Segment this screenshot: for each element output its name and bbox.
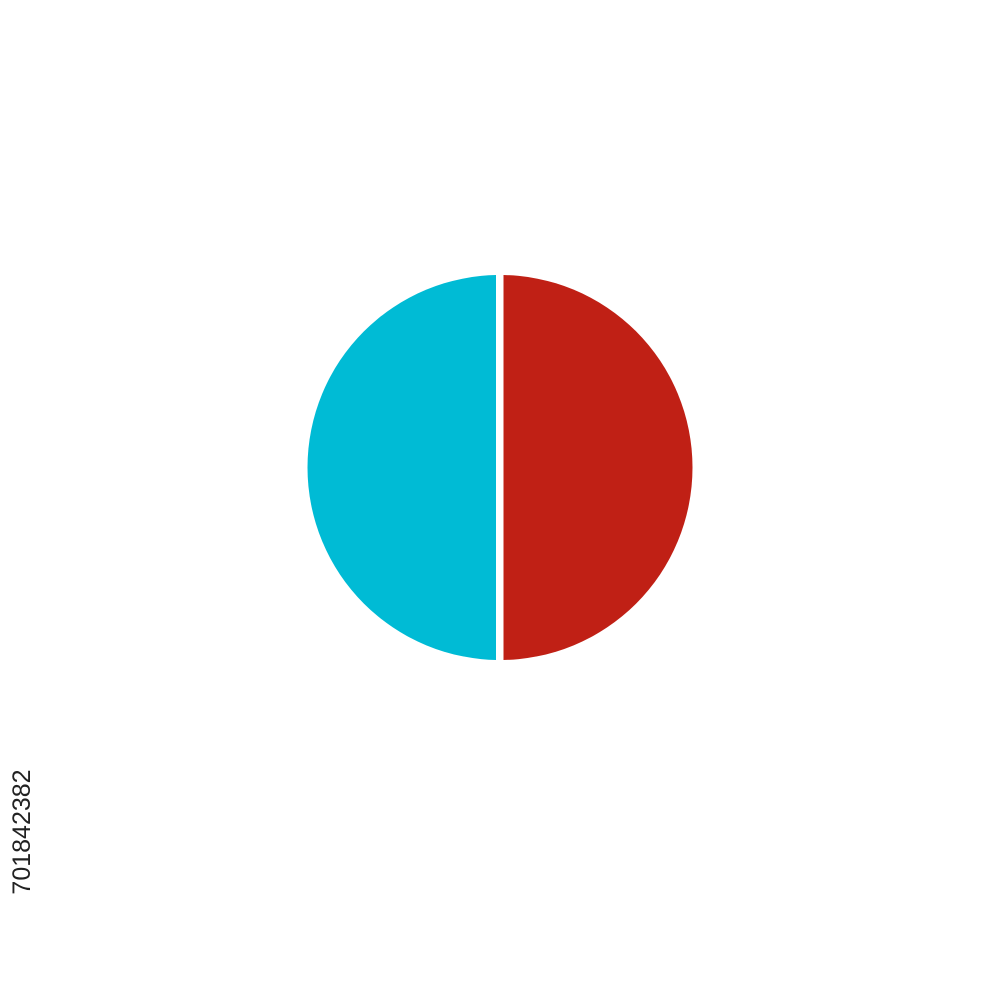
chart: split circle — [308, 275, 692, 660]
right half: red — [504, 275, 692, 660]
left half: cyan — [308, 275, 496, 660]
watermark id text: 701842382 — [8, 769, 36, 895]
